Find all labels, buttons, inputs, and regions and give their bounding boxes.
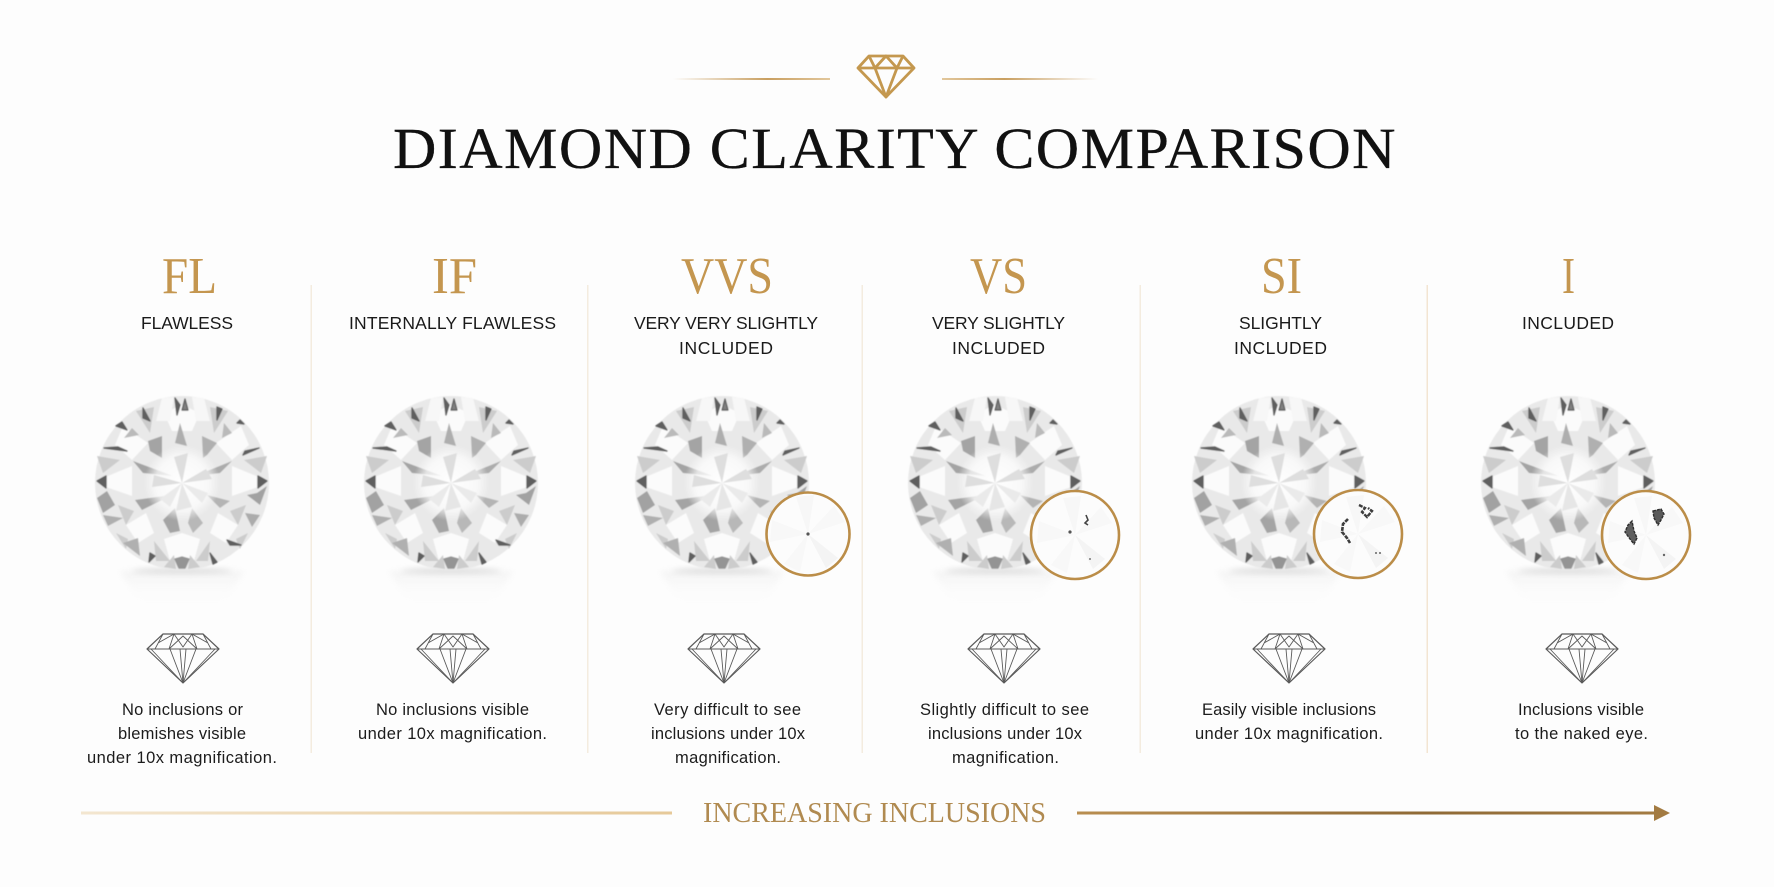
description: SI	[1195, 701, 1383, 743]
diamond photo: IF	[364, 396, 538, 607]
name: flawless: FLAWLESS	[141, 313, 233, 333]
diamond photo: FL	[95, 396, 269, 607]
diamond photo: SI	[1192, 396, 1366, 607]
name: very slightly included: VERY SLIGHTLY	[932, 313, 1065, 333]
name: very very slightly included: VERY VERY SLIGHTLY	[634, 313, 818, 333]
description: I	[1515, 701, 1648, 743]
diamond photo: VVS	[635, 396, 809, 607]
description: IF	[358, 701, 547, 743]
magnifier: SI inclusions	[1314, 490, 1402, 578]
description: FL: No inclusions or	[122, 701, 244, 719]
name: very very slightly included: INCLUDED	[679, 338, 773, 358]
icon: diamond side view	[968, 634, 1040, 683]
scale arrow: increasing inclusions	[81, 798, 1670, 829]
label: increasing inclusions: INCREASING INCLUSIONS	[703, 798, 1046, 829]
magnifier: VS inclusions	[1031, 491, 1119, 579]
panel: VVS very very slightly included	[634, 248, 850, 767]
name: slightly included: SLIGHTLY	[1239, 313, 1322, 333]
description: VS: Slightly difficult to see	[920, 701, 1089, 719]
icon: diamond side view	[1546, 634, 1618, 683]
name: slightly included	[1234, 313, 1327, 358]
description: VVS: magnification.	[675, 749, 781, 767]
description: VVS: inclusions under 10x	[651, 725, 806, 743]
heading: VVS: VVS	[681, 248, 773, 305]
name: included: INCLUDED	[1522, 313, 1614, 333]
heading: VS: VS	[970, 248, 1027, 305]
description: I: Inclusions visible	[1518, 701, 1644, 719]
panel: IF internally flawless	[349, 248, 556, 743]
header ornament: rules and gold diamond	[673, 56, 1098, 97]
name: very very slightly included	[634, 313, 818, 358]
description: FL	[87, 701, 277, 767]
magnifier: I inclusions	[1602, 491, 1690, 579]
description: VVS	[651, 701, 806, 767]
panel: VS very slightly included	[908, 248, 1119, 767]
title: DIAMOND CLARITY COMPARISON	[393, 116, 1397, 181]
description: VVS: Very difficult to see	[654, 701, 801, 719]
icon: diamond side view	[147, 634, 219, 683]
name: slightly included: INCLUDED	[1234, 338, 1327, 358]
panel: SI slightly included	[1192, 248, 1402, 743]
heading: FL: FL	[162, 248, 217, 305]
description: VS	[920, 701, 1089, 767]
description: FL: blemishes visible	[118, 725, 246, 743]
description: IF: No inclusions visible	[376, 701, 529, 719]
description: SI: Easily visible inclusions	[1202, 701, 1376, 719]
magnifier: VVS inclusion	[766, 492, 850, 576]
arrow head	[1654, 805, 1670, 821]
description: I: to the naked eye.	[1515, 725, 1648, 743]
heading: SI: SI	[1261, 248, 1302, 305]
diamond photo: VS	[908, 396, 1082, 607]
icon: diamond side view	[688, 634, 760, 683]
panel: FL flawless	[87, 248, 277, 767]
description: IF: under 10x magnification.	[358, 725, 547, 743]
icon: gold diamond	[858, 56, 914, 97]
description: VS: magnification.	[952, 749, 1059, 767]
column dividers	[310, 285, 1428, 753]
name: internally flawless: INTERNALLY FLAWLESS	[349, 313, 556, 333]
panel: I included	[1481, 248, 1690, 743]
icon: diamond side view	[417, 634, 489, 683]
heading: IF: IF	[432, 248, 477, 305]
name: very slightly included: INCLUDED	[952, 338, 1045, 358]
description: FL: under 10x magnification.	[87, 749, 277, 767]
diamond photo: I	[1481, 396, 1655, 607]
heading: I: I	[1562, 248, 1575, 305]
name: very slightly included	[932, 313, 1065, 358]
description: VS: inclusions under 10x	[928, 725, 1083, 743]
description: SI: under 10x magnification.	[1195, 725, 1383, 743]
icon: diamond side view	[1253, 634, 1325, 683]
